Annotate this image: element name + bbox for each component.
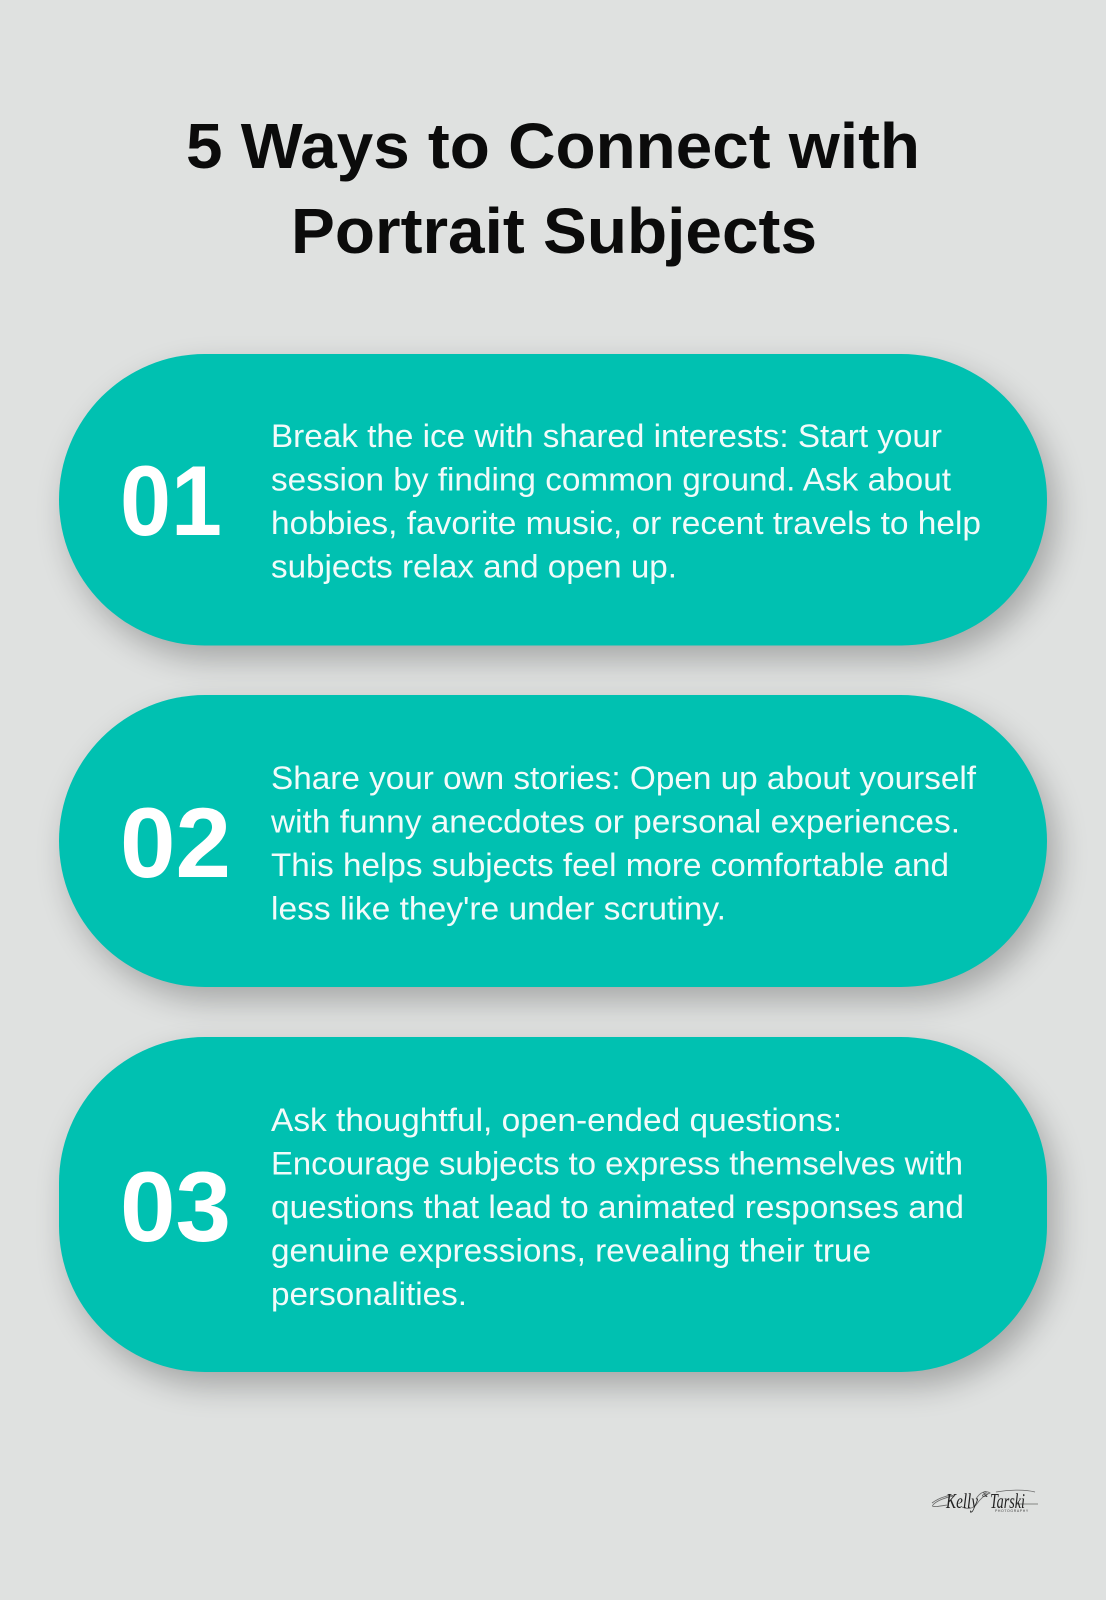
- text: item 03: Ask thoughtful, open-ended questions:: [271, 1102, 842, 1138]
- panel: item 01: [59, 354, 1056, 659]
- text: item 03: genuine expressions, revealing their true: [271, 1232, 871, 1268]
- text: item 02: with funny anecdotes or personal experiences.: [270, 804, 960, 840]
- title: [186, 110, 920, 267]
- text: item 02: less like they're under scrutiny.: [271, 890, 726, 926]
- number 03: 03: [120, 1151, 231, 1262]
- title: 5 Ways to Connect with: [186, 110, 920, 182]
- number 01: 01: [120, 445, 222, 556]
- logo: signature: &: [982, 1490, 989, 1499]
- number 02: 02: [120, 787, 231, 898]
- text: item 01: session by finding common ground. Ask about: [271, 462, 951, 498]
- text: item 03: questions that lead to animated responses and: [271, 1189, 964, 1225]
- text: item 01: subjects relax and open up.: [271, 548, 677, 584]
- text: item 02: Share your own stories: Open up about yourself: [271, 760, 977, 796]
- text: item 01: hobbies, favorite music, or recent travels to help: [271, 505, 981, 541]
- logo: signature: [932, 1489, 1038, 1513]
- text: item 03: personalities.: [271, 1276, 467, 1312]
- text: item 01: [271, 418, 981, 584]
- text: item 02: This helps subjects feel more comfortable and: [271, 847, 949, 883]
- panel: item 03: [59, 1037, 1056, 1386]
- panel: item 02: [59, 695, 1056, 1000]
- logo: signature: Kelly: [945, 1489, 978, 1513]
- logo: signature: Tarski: [990, 1489, 1025, 1513]
- title: Portrait Subjects: [291, 195, 817, 267]
- text: item 03: [271, 1102, 964, 1312]
- text: item 03: Encourage subjects to express themselves with: [271, 1146, 963, 1182]
- text: item 01: Break the ice with shared interests: Start your: [271, 418, 942, 454]
- logo: signature: PHOTOGRAPHY: [995, 1509, 1029, 1513]
- text: item 02: [270, 760, 977, 926]
